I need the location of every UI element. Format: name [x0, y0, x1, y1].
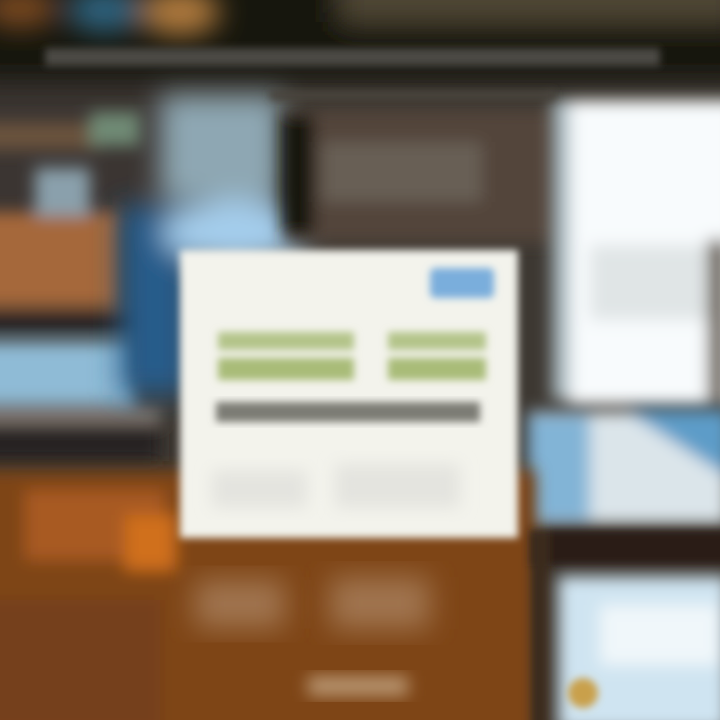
title: dark banner text — [45, 48, 660, 100]
background: top shelf objects — [0, 0, 220, 36]
text block: dark subheading — [216, 402, 480, 422]
background: lower right window — [558, 576, 720, 720]
background: blue table surface — [528, 410, 720, 524]
text block: left column — [212, 470, 307, 508]
heading: green headline — [218, 332, 486, 380]
button: blue tag — [430, 268, 494, 298]
text block: lower left floor — [195, 580, 285, 628]
panel: white card — [180, 250, 518, 538]
background: wooden floor — [0, 470, 535, 720]
background: blue wall panel — [120, 95, 307, 395]
text block: lower middle floor — [330, 577, 430, 629]
text block: right column — [335, 464, 460, 508]
background: right window — [552, 100, 720, 405]
icon: yellow badge — [568, 678, 598, 708]
footer: pale label — [308, 676, 408, 696]
panel: dark upper text box — [282, 110, 555, 242]
background: dark table edge — [530, 530, 720, 720]
background: left shelves — [0, 112, 160, 461]
